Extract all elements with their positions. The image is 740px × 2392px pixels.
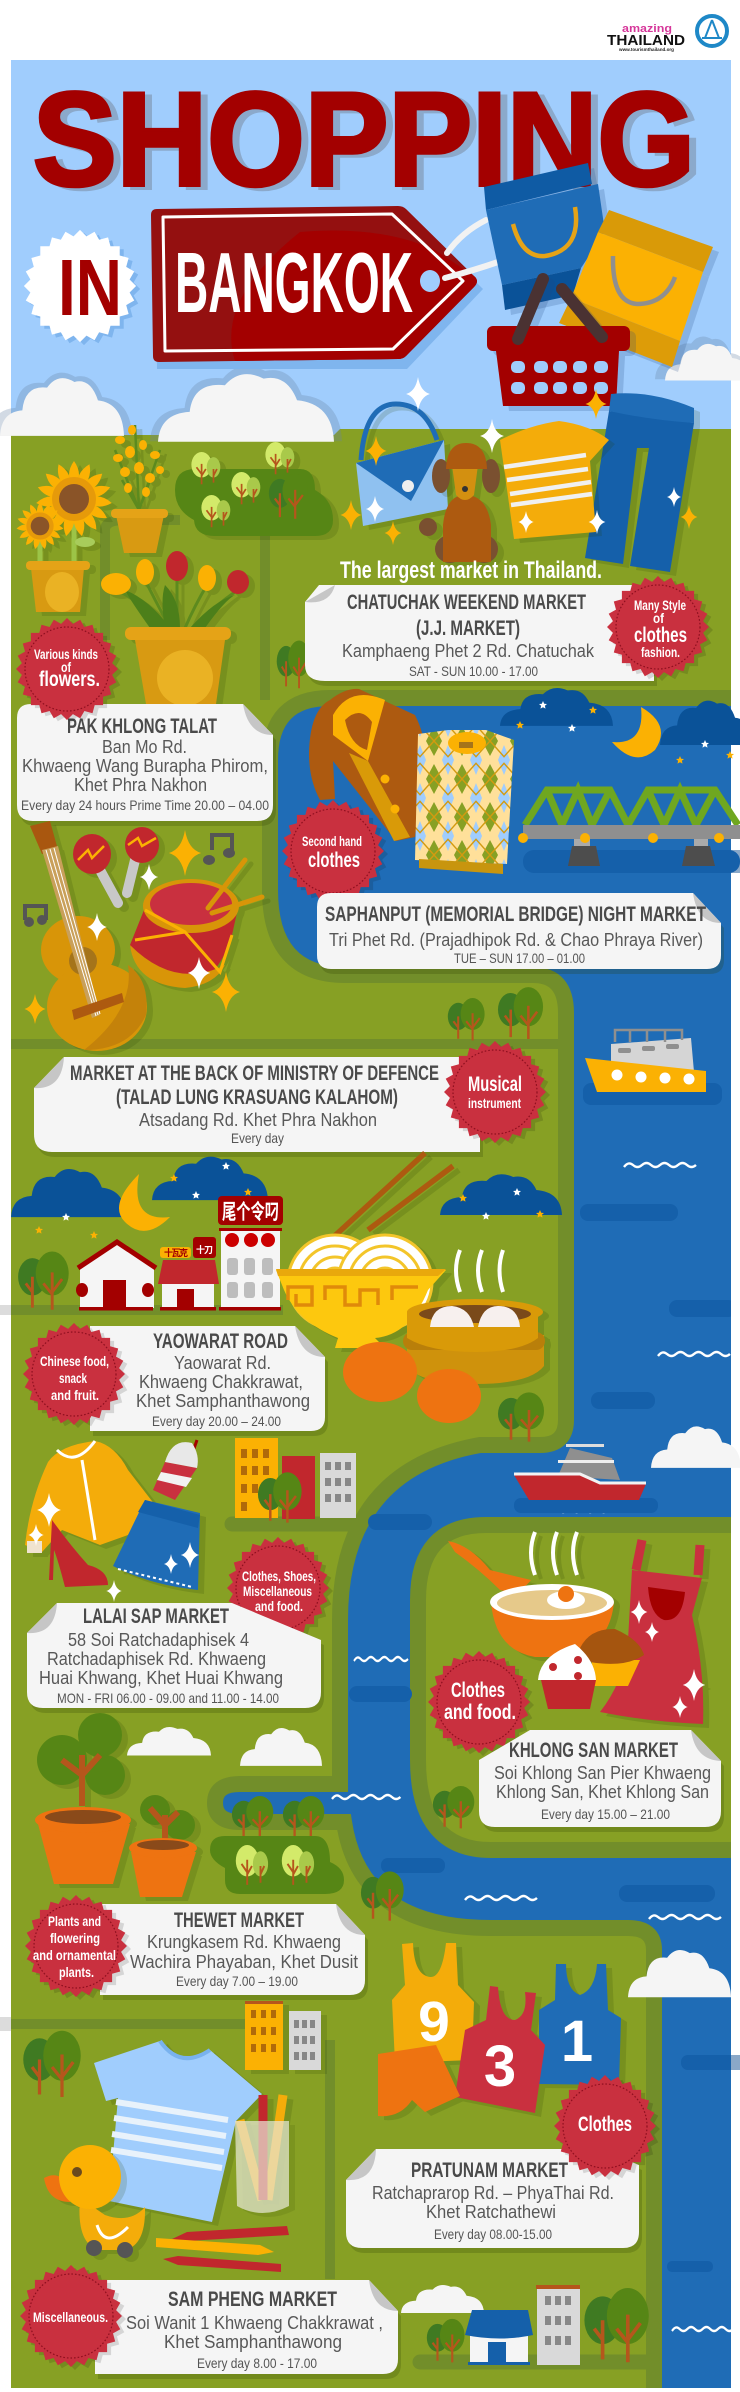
illustration: yellow flower plant in pot bbox=[111, 425, 168, 553]
red jersey 3: 3 bbox=[484, 2034, 516, 2099]
logo: Amazing Thailand: www.tourismthailand.org bbox=[618, 47, 674, 52]
illustration: maracas bbox=[73, 827, 159, 903]
clouds at horizon bbox=[0, 336, 740, 442]
icon: red basket bbox=[487, 279, 630, 406]
title: SHOPPING: SHOPPING bbox=[40, 69, 702, 217]
card: Pak Khlong Talat: Every day 24 hours Prime Time 20.00 – 04.00 bbox=[21, 797, 269, 813]
badge: miscellaneous: Miscellaneous. bbox=[33, 2309, 108, 2325]
illustration: sports jerseys bbox=[378, 1943, 621, 2116]
card: Saphanput night market: TUE – SUN 17.00 – 01.00 bbox=[454, 950, 585, 966]
illustration: toy duck bbox=[44, 2145, 145, 2258]
badge: musical instrument bbox=[444, 1041, 550, 1146]
badge: Chinese food, snack and fruit bbox=[23, 1323, 129, 1428]
grey tower bbox=[536, 2285, 580, 2365]
illustration: bushes and trees by canal bbox=[210, 1796, 404, 1921]
card: Chatuchak Weekend Market: SAT - SUN 10.00 - 17.00 bbox=[409, 663, 538, 679]
title: SHOPPING: SHOPPING bbox=[33, 66, 695, 214]
badge: second hand clothes bbox=[282, 800, 388, 905]
trees near defence market bbox=[448, 987, 543, 1040]
card: Lalai Sap Market: MON - FRI 06.00 - 09.00 and 11.00 - 14.00 bbox=[57, 1690, 279, 1706]
icon: yellow shopping bag bbox=[559, 210, 713, 367]
small shop: 十刀 bbox=[196, 1244, 213, 1255]
badge: various kinds of flowers: Various kinds bbox=[34, 646, 98, 662]
logo: Amazing Thailand: THAILAND bbox=[607, 32, 685, 49]
badge: clothes: Clothes bbox=[578, 2113, 632, 2136]
illustration: bushes bbox=[175, 442, 333, 536]
card: Thewet Market: THEWET MARKET bbox=[174, 1909, 304, 1932]
card: Lalai Sap Market: 58 Soi Ratchadaphisek 4 bbox=[68, 1630, 249, 1650]
card: Sam Pheng Market: SAM PHENG MARKET bbox=[168, 2288, 337, 2311]
badge: clothes, shoes, miscellaneous and food bbox=[227, 1537, 333, 1642]
card: Pak Khlong Talat bbox=[17, 704, 273, 821]
badge: many style of clothes: of bbox=[653, 610, 664, 626]
badge: many style of clothes bbox=[607, 576, 713, 681]
roads bbox=[0, 520, 656, 2362]
badge: plants: Plants and bbox=[48, 1913, 101, 1929]
night clouds, moon and stars over river bbox=[500, 688, 740, 764]
illustration: red speed boat bbox=[514, 1444, 658, 1513]
icon: blue handbag bbox=[356, 404, 448, 526]
card: Saphanput night market bbox=[317, 893, 721, 969]
card: Pratunam Market: PRATUNAM MARKET bbox=[411, 2159, 568, 2182]
yellow jersey 9 bbox=[392, 1943, 474, 2063]
card: Pak Khlong Talat: PAK KHLONG TALAT bbox=[67, 715, 217, 738]
trees in Yaowarat bbox=[18, 1252, 69, 1310]
card: Sam Pheng Market: Khet Samphanthawong bbox=[164, 2332, 342, 2352]
red jersey 3 bbox=[455, 1986, 545, 2113]
illustration: blue skirt bbox=[113, 1500, 200, 1590]
tree beside Khlong San card bbox=[433, 1786, 474, 1828]
badge: musical instrument: Musical bbox=[468, 1073, 522, 1096]
badge: clothes and food: and food. bbox=[444, 1701, 516, 1724]
orange shorts bbox=[378, 2045, 460, 2116]
river ripples bbox=[349, 1204, 740, 2272]
river bbox=[215, 698, 740, 2392]
logo: Amazing Thailand: amazing bbox=[622, 23, 672, 35]
illustration: red high heel bbox=[28, 1493, 122, 1602]
illustration: bottom right town bbox=[401, 2285, 649, 2365]
card: Sam Pheng Market bbox=[95, 2280, 398, 2374]
badge: Chinese food, snack and fruit: snack bbox=[59, 1370, 87, 1386]
badge: clothes, shoes, miscellaneous and food: Miscellaneous bbox=[243, 1583, 312, 1599]
illustration: potted trees bbox=[35, 1713, 197, 1897]
card: Pak Khlong Talat: Ban Mo Rd. bbox=[102, 737, 187, 757]
badge: second hand clothes: Second hand bbox=[302, 833, 362, 849]
illustration: yellow jacket bbox=[25, 1441, 155, 1553]
card: Lalai Sap Market: LALAI SAP MARKET bbox=[83, 1605, 229, 1628]
illustration: orange and grey towers bbox=[245, 2001, 321, 2070]
card: Lalai Sap Market: Huai Khwang, Khet Huai Khwang bbox=[39, 1668, 283, 1688]
card: Pratunam Market: Khet Ratchathewi bbox=[426, 2202, 556, 2222]
card: Yaowarat Road: Every day 20.00 – 24.00 bbox=[152, 1413, 281, 1429]
illustration: argyle vest bbox=[415, 730, 514, 874]
sparkles near market goods bbox=[340, 377, 697, 545]
badge: musical instrument: instrument bbox=[468, 1095, 521, 1111]
card: Thewet Market bbox=[100, 1904, 365, 1995]
badge: many style of clothes: Many Style bbox=[634, 597, 686, 613]
card: Lalai Sap Market: Ratchadaphisek Rd. Khwaeng bbox=[47, 1649, 266, 1669]
badge: clothes, shoes, miscellaneous and food: and food. bbox=[255, 1598, 303, 1614]
white waves bbox=[332, 1163, 733, 2331]
illustration: soup bowl with spoon bbox=[448, 1532, 614, 1657]
card: Khlong San Market bbox=[479, 1730, 721, 1827]
illustration: tulips in pot bbox=[101, 551, 249, 706]
badge: many style of clothes: clothes bbox=[634, 624, 687, 647]
badge: Chinese food, snack and fruit: and fruit. bbox=[51, 1387, 99, 1403]
badge: clothes and food bbox=[428, 1651, 534, 1756]
badge: IN starburst: IN bbox=[58, 243, 122, 332]
card: Yaowarat Road: Khwaeng Chakkrawat, bbox=[139, 1372, 303, 1392]
icon: blue shopping bag bbox=[484, 163, 605, 310]
card: Yaowarat Road: YAOWARAT ROAD bbox=[153, 1330, 288, 1353]
card: Pratunam Market: Every day 08.00-15.00 bbox=[434, 2226, 552, 2242]
card: Khlong San Market: Every day 15.00 – 21.00 bbox=[541, 1806, 670, 1822]
icon: brown poodle bbox=[419, 443, 500, 563]
yellow jersey 9: 9 bbox=[418, 1990, 450, 2054]
badge: plants: flowering bbox=[50, 1930, 100, 1946]
badge: clothes bbox=[554, 2075, 660, 2180]
card: Chatuchak Weekend Market bbox=[305, 557, 654, 681]
card: Yaowarat Road: Yaowarat Rd. bbox=[174, 1353, 271, 1373]
illustration: sunflowers in pot bbox=[16, 461, 112, 612]
small shop: 十瓦克 bbox=[164, 1247, 188, 1258]
illustration: city buildings bbox=[235, 1438, 356, 1523]
card: Thewet Market: Wachira Phayaban, Khet Dusit bbox=[130, 1952, 358, 1972]
illustration: green bridge bbox=[518, 790, 740, 873]
illustration: light blue striped t-shirt bbox=[94, 2041, 262, 2222]
card: Pak Khlong Talat: Khet Phra Nakhon bbox=[74, 775, 207, 795]
illustration: guitar bbox=[30, 821, 147, 1051]
logo: Amazing Thailand bbox=[607, 23, 685, 52]
icon: noodle bowl bbox=[276, 1153, 453, 1348]
card: Sam Pheng Market: Every day 8.00 - 17.00 bbox=[197, 2355, 317, 2371]
card: Pratunam Market: Ratchaprarop Rd. – PhyaThai Rd. bbox=[372, 2183, 614, 2203]
price tag: BANGKOK bbox=[151, 206, 498, 369]
illustration: second hand jacket bbox=[309, 689, 425, 841]
card: Pratunam Market bbox=[346, 2149, 639, 2248]
tall building bbox=[218, 1196, 283, 1310]
small shop bbox=[158, 1237, 219, 1310]
card: Market at the back of Ministry of Defence bbox=[34, 1057, 480, 1152]
label: largest market: The largest market in Thailand. bbox=[340, 557, 602, 584]
card: Sam Pheng Market: Soi Wanit 1 Khwaeng Chakkrawat , bbox=[126, 2313, 383, 2333]
badge: Chinese food, snack and fruit: Chinese food, bbox=[40, 1353, 109, 1369]
badge: various kinds of flowers bbox=[16, 618, 122, 723]
badge: miscellaneous bbox=[20, 2265, 126, 2370]
logos bbox=[607, 16, 727, 52]
blue jersey 1: 1 bbox=[561, 2009, 593, 2074]
tree near steamer bbox=[498, 1392, 544, 1442]
badge: plants bbox=[25, 1895, 131, 2000]
badge: many style of clothes: fashion. bbox=[641, 644, 680, 660]
white house bbox=[76, 1242, 156, 1310]
card: Pak Khlong Talat: Khwaeng Wang Burapha Phirom, bbox=[22, 756, 268, 776]
card: Lalai Sap Market bbox=[27, 1603, 321, 1708]
illustration: cupcake and muffin bbox=[538, 1629, 644, 1709]
badge: various kinds of flowers: of bbox=[61, 659, 71, 675]
card: Market at the back of Ministry of Defence: (TALAD LUNG KRASUANG KALAHOM) bbox=[116, 1086, 398, 1109]
cloud over river bbox=[651, 1426, 740, 1468]
badge: second hand clothes: clothes bbox=[308, 849, 360, 872]
badge: various kinds of flowers: flowers. bbox=[39, 668, 100, 691]
card: Khlong San Market: KHLONG SAN MARKET bbox=[509, 1739, 678, 1762]
icon: oranges bbox=[343, 1342, 481, 1423]
card: Thewet Market: Krungkasem Rd. Khwaeng bbox=[147, 1932, 341, 1952]
small clouds bbox=[127, 1727, 322, 1766]
icon: dim sum steamer bbox=[403, 1299, 545, 1384]
overflow strips at page edge bbox=[0, 850, 740, 2070]
card: Market at the back of Ministry of Defence: Every day bbox=[231, 1130, 284, 1146]
illustration: Chinatown buildings bbox=[76, 1196, 283, 1310]
card: Chatuchak Weekend Market: CHATUCHAK WEEKEND MARKET bbox=[347, 591, 586, 614]
illustration: yellow ferry boat bbox=[583, 1030, 722, 1105]
icon: yellow striped shirt bbox=[500, 421, 609, 539]
badge: clothes and food: Clothes bbox=[451, 1679, 505, 1702]
icon: steam bbox=[456, 1250, 503, 1292]
illustration: coloured pencils bbox=[156, 2226, 289, 2272]
badge: plants: and ornamental bbox=[33, 1947, 116, 1963]
card: Market at the back of Ministry of Defence: Atsadang Rd. Khet Phra Nakhon bbox=[139, 1110, 377, 1130]
tall building: 尾个令叼 bbox=[222, 1200, 279, 1224]
badge: IN starburst bbox=[24, 230, 140, 345]
badge: plants: plants. bbox=[59, 1964, 94, 1980]
price tag: BANGKOK: BANGKOK bbox=[175, 236, 413, 331]
blue roof shop bbox=[465, 2310, 533, 2365]
night scene: clouds and moon bbox=[11, 1157, 562, 1239]
icon: blue jeans bbox=[585, 393, 694, 572]
card: Yaowarat Road bbox=[90, 1326, 325, 1431]
illustration: pencil glass bbox=[235, 2095, 289, 2213]
card: Market at the back of Ministry of Defence: MARKET AT THE BACK OF MINISTRY OF DEFENCE bbox=[70, 1062, 439, 1085]
card: Chatuchak Weekend Market: (J.J. MARKET) bbox=[416, 617, 520, 640]
card: Saphanput night market: Tri Phet Rd. (Prajadhipok Rd. & Chao Phraya River) bbox=[329, 930, 703, 950]
card: Khlong San Market: Soi Khlong San Pier Khwaeng bbox=[494, 1763, 711, 1783]
illustration: red apron dress bbox=[600, 1540, 705, 1724]
music notes and sparkles bbox=[24, 830, 240, 1024]
tree left of t-shirt bbox=[23, 2031, 81, 2097]
blue jersey 1 bbox=[539, 1964, 621, 2085]
cloud at right edge bbox=[628, 1950, 731, 1997]
badge: clothes, shoes, miscellaneous and food: Clothes, Shoes, bbox=[242, 1568, 316, 1584]
card: Khlong San Market: Khlong San, Khet Khlong San bbox=[496, 1782, 709, 1802]
card: Chatuchak Weekend Market: Kamphaeng Phet 2 Rd. Chatuchak bbox=[342, 641, 595, 661]
card: Thewet Market: Every day 7.00 – 19.00 bbox=[176, 1973, 298, 1989]
illustration: drink cup bbox=[153, 1440, 198, 1500]
illustration: red drum bbox=[130, 860, 262, 988]
logo: round seal bbox=[697, 16, 727, 46]
tree beside chatuchak bbox=[277, 640, 310, 688]
card: Yaowarat Road: Khet Samphanthawong bbox=[136, 1391, 310, 1411]
